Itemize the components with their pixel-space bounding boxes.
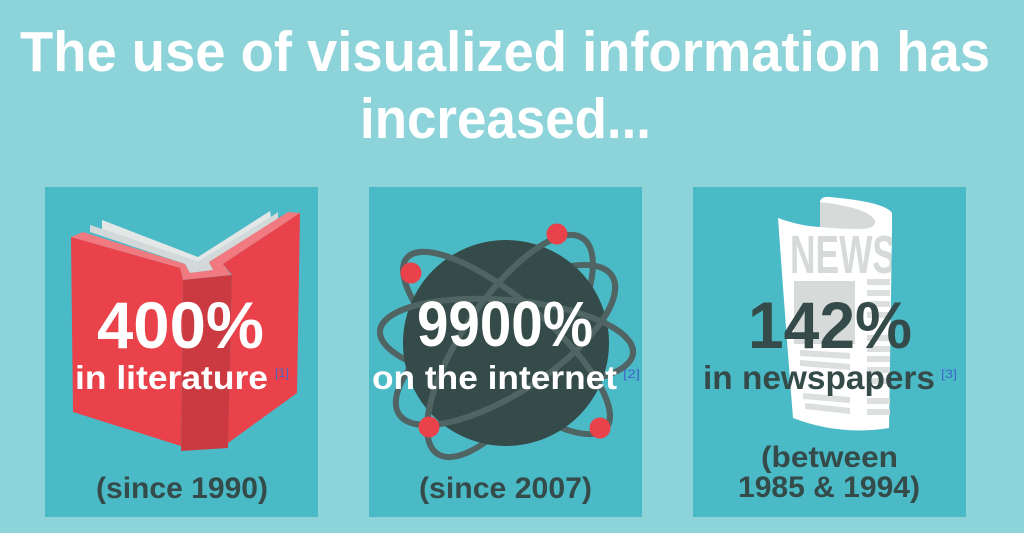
note: since 2007: (since 2007): [419, 472, 592, 505]
icon: rolled newspaper: NEWS: [790, 225, 896, 285]
title: [20, 20, 990, 151]
stat: 142%: 142%: [748, 288, 912, 362]
note: since 1990: (since 1990): [96, 472, 268, 505]
icon: atom globe: [373, 211, 638, 481]
note: between 1985 and 1994: [738, 441, 920, 504]
icon: rolled newspaper: [778, 197, 896, 430]
panel: internet: [369, 187, 642, 517]
icon: open red book: [71, 211, 300, 451]
label: on the internet: on the internet: [372, 359, 617, 396]
note: between 1985 and 1994: (between: [761, 441, 898, 474]
stat: 400%: 400%: [97, 288, 264, 362]
label: in literature: in literature: [75, 359, 268, 396]
stat: 9900%: 9900%: [417, 288, 593, 360]
note: between 1985 and 1994: 1985 & 1994): [738, 471, 920, 504]
label: in newspapers: in newspapers: [703, 359, 935, 396]
citation 3: [3]: [941, 367, 957, 381]
panel: newspapers: [693, 187, 966, 517]
title: The use of visualized information has: [20, 20, 990, 84]
citation 2: [2]: [623, 367, 640, 381]
panel: literature: [45, 187, 318, 517]
citation 1: [1]: [275, 366, 289, 380]
title: increased...: [360, 87, 651, 151]
